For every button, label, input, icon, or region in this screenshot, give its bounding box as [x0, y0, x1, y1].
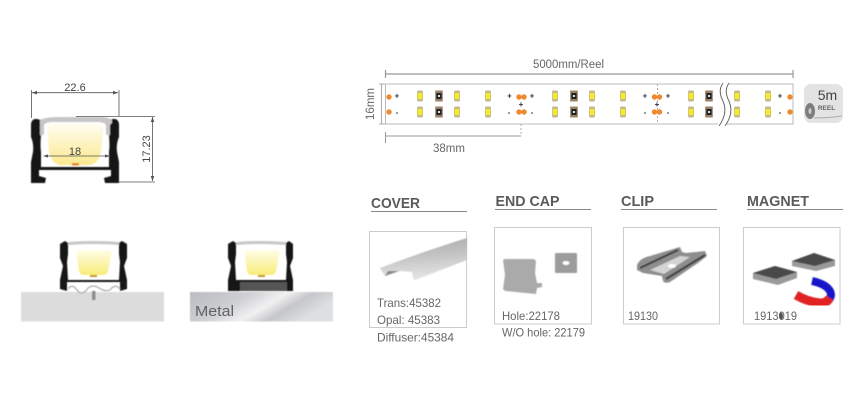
box	[744, 228, 840, 324]
panel: cover: Opal: 45383	[377, 313, 440, 327]
panel: cover	[370, 195, 467, 344]
dimension: height 17.23	[76, 116, 155, 182]
drawing: clip mounting on surface	[21, 241, 164, 322]
light glow	[76, 250, 112, 275]
part numbers: Hole:22178	[502, 309, 560, 323]
polarity marks: +	[778, 92, 783, 100]
polarity marks: -	[644, 108, 647, 117]
label: 38mm: 38mm	[433, 143, 465, 155]
LED	[90, 275, 97, 277]
part number: 1913019	[754, 309, 797, 323]
width dimension	[379, 84, 385, 124]
clip image	[637, 247, 707, 283]
polarity marks: +	[519, 100, 524, 109]
polarity marks: +	[643, 92, 648, 100]
panel: end cap: W/O hole: 22179	[502, 326, 585, 340]
strip break mark	[719, 83, 731, 126]
polarity marks: +	[666, 92, 671, 100]
label: 18: 18	[69, 146, 81, 158]
drawing: magnet mounting on metal	[190, 241, 333, 322]
heading: CLIP: CLIP	[621, 193, 654, 210]
polarity marks: -	[396, 108, 399, 117]
polarity marks: -	[531, 108, 534, 117]
label: 16mm: 16mm	[365, 88, 377, 120]
part number: 19130	[628, 309, 658, 323]
polarity marks: -	[779, 108, 782, 117]
panel: clip	[621, 193, 720, 324]
polarity marks: +	[655, 100, 660, 109]
metal surface	[190, 292, 333, 322]
heading: MAGNET: MAGNET	[747, 193, 809, 210]
heading: COVER: COVER	[371, 195, 420, 212]
cover	[68, 241, 119, 245]
label: 5000mm/Reel: 5000mm/Reel	[533, 59, 604, 71]
reel length dimension	[386, 70, 793, 78]
box	[624, 228, 720, 324]
profile body	[31, 117, 119, 183]
segment dimension	[386, 84, 658, 143]
part number smudge	[779, 312, 783, 320]
icon: 5m reel: REEL	[818, 105, 835, 112]
solder pads	[386, 94, 793, 115]
polarity marks: +	[530, 92, 535, 100]
polarity marks: +	[507, 92, 512, 100]
polarity marks: -	[667, 108, 670, 117]
diagram: LED strip dimensions	[365, 59, 843, 155]
dimension: width 22.6	[32, 90, 119, 118]
LEDs bottom row	[417, 106, 771, 118]
label: Metal: Metal	[195, 304, 234, 320]
part numbers: Trans:45382	[377, 296, 441, 310]
profile walls and base	[60, 241, 127, 291]
profile on metal	[228, 241, 293, 291]
cover strip image	[380, 238, 467, 280]
heading: END CAP: END CAP	[496, 193, 560, 210]
label: 22.6: 22.6	[64, 82, 86, 94]
box	[494, 228, 592, 324]
polarity marks: -	[508, 108, 511, 117]
end cap image	[503, 253, 577, 294]
panel: magnet	[744, 193, 843, 324]
LEDs top row	[417, 90, 771, 102]
polarity marks: +	[395, 92, 400, 100]
mounting surface	[21, 292, 164, 322]
panel: cover: Diffuser:45384	[377, 330, 454, 344]
panel: end cap	[494, 193, 592, 340]
label: 17.23: 17.23	[141, 135, 153, 163]
dimension: inner width 18	[43, 154, 110, 158]
box	[370, 232, 466, 328]
magnet image	[753, 253, 835, 303]
polarity marks	[395, 92, 783, 117]
strip outline	[386, 84, 793, 124]
icon: 5m reel	[804, 84, 843, 123]
clip and screw	[68, 286, 120, 293]
drawing: profile cross-section with dimensions	[31, 82, 155, 183]
icon: 5m reel: 5m	[818, 87, 837, 103]
